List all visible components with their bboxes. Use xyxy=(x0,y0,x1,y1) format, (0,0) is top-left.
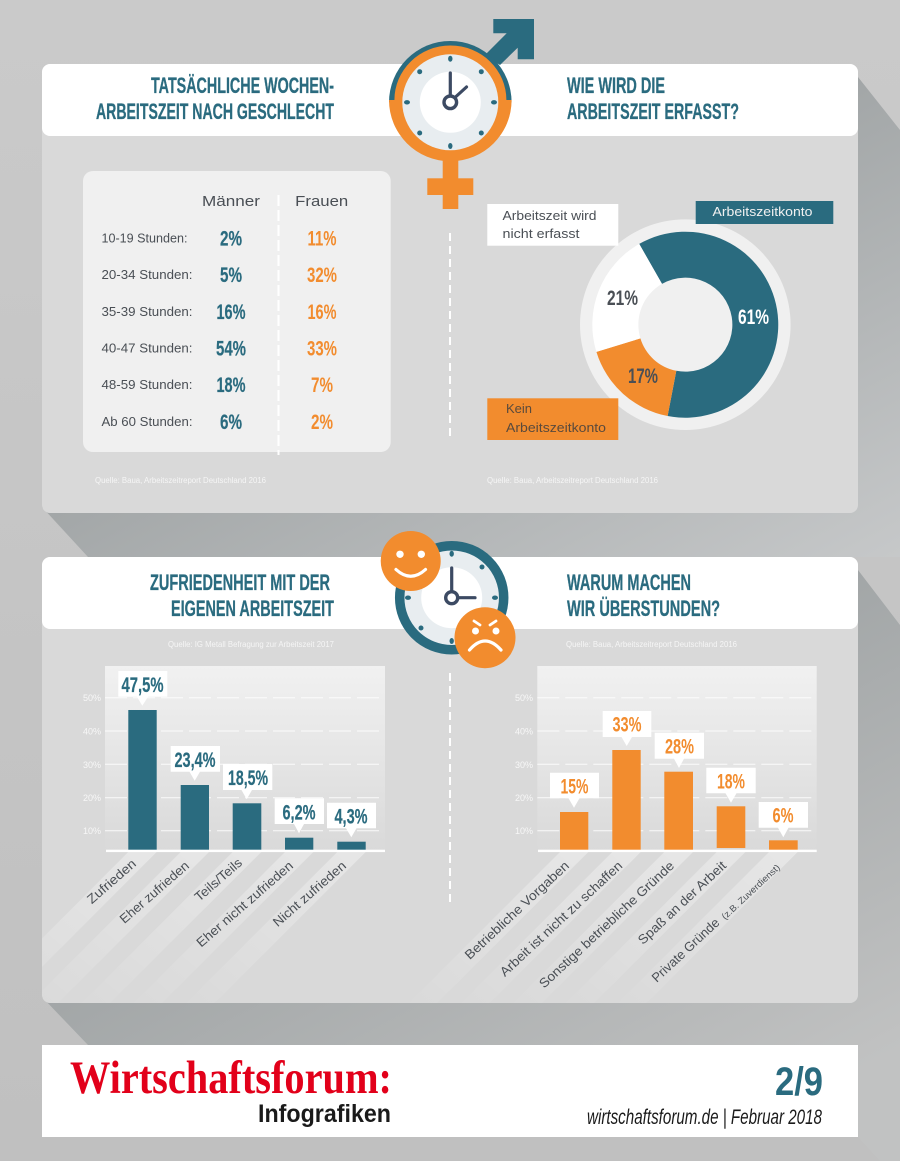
callout: 18,5%: 18,5% xyxy=(228,767,268,790)
bar chart: satisfaction xyxy=(74,666,385,947)
axis labels: overtime reasons: Betriebliche Vorgaben xyxy=(462,858,572,962)
heading: why do we work overtime xyxy=(567,570,720,621)
source: left: Quelle: Baua, Arbeitszeitreport Deutschland 2016 xyxy=(95,476,267,485)
callout: 47,5% xyxy=(118,671,167,706)
donut slice: 17% xyxy=(596,338,676,416)
axis labels: satisfaction: Zufrieden xyxy=(84,856,139,907)
heading: weekly working time by gender: ARBEITSZEIT NACH GESCHLECHT xyxy=(96,99,334,124)
table: hours by gender: 18% xyxy=(216,374,246,397)
long shadow: bottom panel xyxy=(42,570,900,1161)
axis labels: satisfaction xyxy=(84,855,349,950)
panel: top section xyxy=(42,64,858,513)
callout: 6,2%: 6,2% xyxy=(282,802,316,824)
bar chart: satisfaction: 20% xyxy=(83,793,101,803)
callout: 4,3%: 4,3% xyxy=(334,806,368,828)
callout: 47,5%: 47,5% xyxy=(122,674,164,697)
donut chart: 21% xyxy=(607,287,638,310)
axis labels: overtime reasons: Sonstige betriebliche Gründe xyxy=(536,858,677,991)
axis labels: overtime reasons: (z.B. Zuverdienst) xyxy=(720,862,782,921)
axis labels: overtime reasons: Private Gründe xyxy=(649,915,722,985)
donut chart xyxy=(580,219,791,430)
heading: satisfaction with working time xyxy=(150,570,334,621)
callout: 6% xyxy=(759,802,808,837)
axis labels: overtime reasons: Spaß an der Arbeit xyxy=(635,858,729,947)
label: working time account xyxy=(696,201,833,224)
label: not recorded: nicht erfasst xyxy=(502,226,580,241)
label: no working time account: Kein xyxy=(506,401,532,416)
table: hours by gender: 16% xyxy=(216,301,246,324)
bar chart: overtime reasons: 50% xyxy=(515,693,533,703)
table: hours by gender: 6% xyxy=(220,411,242,434)
table: hours by gender: 35-39 Stunden: xyxy=(102,304,192,319)
icon: clock with gender symbols xyxy=(389,19,534,209)
table: hours by gender xyxy=(83,171,391,455)
table: hours by gender: Männer xyxy=(202,194,260,210)
table: hours by gender: 2% xyxy=(311,411,333,434)
bar chart: satisfaction: 30% xyxy=(83,760,101,770)
label: not recorded xyxy=(487,204,618,246)
bar chart: overtime reasons: 30% xyxy=(515,760,533,770)
heading: why do we work overtime: WARUM MACHEN xyxy=(567,570,691,595)
callout: 33% xyxy=(603,711,651,746)
table: hours by gender: 2% xyxy=(220,228,242,250)
callout: 15% xyxy=(550,773,599,808)
table: hours by gender: 40-47 Stunden: xyxy=(102,340,192,356)
callout: 23,4%: 23,4% xyxy=(174,749,216,772)
donut chart: 17% xyxy=(628,365,658,388)
heading: satisfaction with working time: EIGENEN ARBEITSZEIT xyxy=(171,596,334,621)
table: hours by gender: 32% xyxy=(307,264,337,287)
callout: 4,3% xyxy=(327,803,376,837)
table: hours by gender: 54% xyxy=(216,338,246,360)
icon: clock with smileys xyxy=(381,531,516,668)
heading: how is working time recorded: WIE WIRD DIE xyxy=(567,73,665,98)
table: hours by gender: Frauen xyxy=(295,194,348,210)
icon: angry smiley xyxy=(454,607,516,668)
callout: 28% xyxy=(655,733,704,768)
callout: 6,2% xyxy=(275,798,324,833)
bar chart: overtime reasons: 10% xyxy=(515,826,533,836)
footer logo: Wirtschaftsforum: xyxy=(70,1052,392,1104)
label: not recorded: Arbeitszeit wird xyxy=(502,208,596,223)
callout: 23,4% xyxy=(171,746,220,781)
donut slice: 21% xyxy=(592,244,662,352)
bar chart: satisfaction: 50% xyxy=(83,693,101,703)
label: no working time account xyxy=(487,398,618,440)
table: hours by gender: 10-19 Stunden: xyxy=(102,230,188,246)
source: overtime chart: Quelle: Baua, Arbeitszeitreport Deutschland 2016 xyxy=(566,640,738,649)
table: hours by gender: Ab 60 Stunden: xyxy=(102,414,192,429)
panel: bottom section xyxy=(0,557,858,1009)
callout: 6%: 6% xyxy=(772,804,794,828)
heading: weekly working time by gender: TATSÄCHLICHE WOCHEN- xyxy=(151,73,334,98)
footer logo: Infografiken xyxy=(258,1100,391,1128)
axis labels: overtime reasons: Arbeit ist nicht zu schaffen xyxy=(497,858,625,979)
icon: happy smiley xyxy=(381,531,441,591)
donut chart: 61% xyxy=(738,306,769,329)
table: hours by gender: 33% xyxy=(307,338,337,360)
donut slice: 61% xyxy=(639,232,778,418)
heading: how is working time recorded xyxy=(567,73,739,124)
axis labels: satisfaction: Teils/Teils xyxy=(191,855,245,904)
heading: why do we work overtime: WIR ÜBERSTUNDEN? xyxy=(567,596,720,621)
table: hours by gender: 20-34 Stunden: xyxy=(102,267,192,282)
heading: how is working time recorded: ARBEITSZEIT ERFASST? xyxy=(567,99,739,124)
source: satisfaction chart: Quelle: IG Metall Befragung zur Arbeitszeit 2017 xyxy=(168,640,335,649)
label: no working time account: Arbeitszeitkonto xyxy=(506,420,606,435)
table: hours by gender: 11% xyxy=(308,228,337,250)
footer bar xyxy=(42,1045,858,1137)
callout: 18%: 18% xyxy=(717,770,745,794)
axis labels: satisfaction: Nicht zufrieden xyxy=(270,858,349,930)
source: right: Quelle: Baua, Arbeitszeitreport Deutschland 2016 xyxy=(487,476,659,485)
bar chart: satisfaction: 40% xyxy=(83,726,101,736)
label: working time account: Arbeitszeitkonto xyxy=(712,204,812,219)
bar chart: overtime reasons: 20% xyxy=(515,793,533,803)
axis labels: overtime reasons xyxy=(462,858,782,991)
page number: 2/9 xyxy=(775,1060,823,1104)
table: hours by gender: 7% xyxy=(311,374,333,397)
heading: satisfaction with working time: ZUFRIEDENHEIT MIT DER xyxy=(150,570,330,595)
bar chart: overtime reasons xyxy=(464,666,817,988)
bar chart: satisfaction: 10% xyxy=(83,826,101,836)
axis labels: satisfaction: Eher nicht zufrieden xyxy=(193,858,296,950)
callout: 33%: 33% xyxy=(612,714,642,736)
table: hours by gender: 16% xyxy=(308,301,337,324)
axis labels: satisfaction: Eher zufrieden xyxy=(116,858,192,926)
callout: 28%: 28% xyxy=(665,736,694,758)
bar chart: overtime reasons: 40% xyxy=(515,726,533,736)
callout: 18,5% xyxy=(223,764,272,799)
table: hours by gender: 5% xyxy=(220,264,242,287)
footer logo xyxy=(70,1052,392,1128)
heading: weekly working time by gender xyxy=(96,73,334,124)
callout: 18% xyxy=(706,768,756,803)
table: hours by gender: 48-59 Stunden: xyxy=(102,377,192,392)
callout: 15%: 15% xyxy=(560,776,589,798)
long shadow: top panel xyxy=(42,77,900,557)
